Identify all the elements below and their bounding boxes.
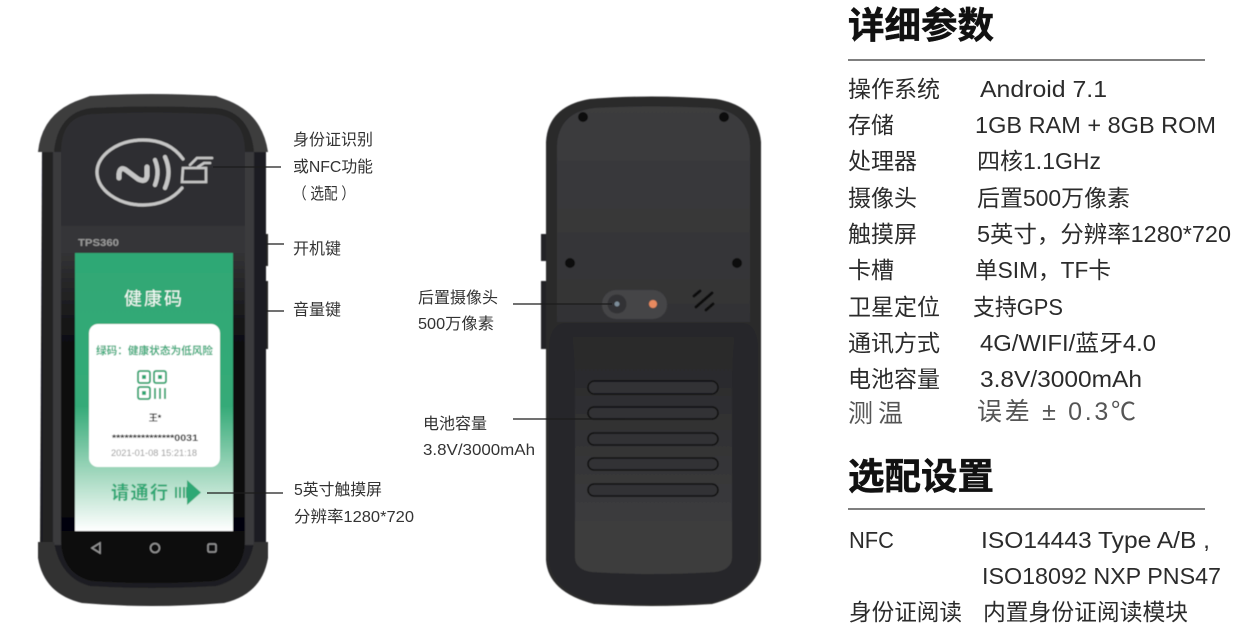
- nav buttons: [92, 543, 216, 553]
- options table: 身份证阅读: [849, 599, 962, 625]
- spec table: 操作系统: [848, 76, 940, 102]
- callout: touchscreen: 5英寸触摸屏: [294, 481, 382, 499]
- spec table: 处理器: [848, 148, 917, 174]
- card status: 绿码：健康状态为低风险: [96, 344, 214, 357]
- icon: QR code: [138, 371, 166, 399]
- spec table: 四核1.1GHz: [977, 148, 1101, 174]
- options table: NFC: [849, 527, 894, 553]
- top bumper: [38, 94, 268, 152]
- back body: [546, 96, 761, 606]
- spec table: 后置500万像素: [977, 185, 1130, 211]
- options table: [849, 527, 1221, 625]
- callout: NFC: 或NFC功能: [293, 158, 373, 176]
- callout: NFC: （ 选配 ）: [293, 185, 355, 203]
- callout: battery: 3.8V/3000mAh: [423, 442, 535, 459]
- screen title: 健康码: [124, 289, 182, 309]
- callout: touchscreen: 分辨率1280*720: [294, 508, 414, 526]
- callout: touchscreen: [294, 481, 414, 526]
- top panel: [61, 112, 245, 226]
- callout: power: 开机键: [293, 240, 341, 258]
- screen bezel: [61, 226, 245, 583]
- callout: camera: 后置摄像头: [418, 289, 498, 307]
- callout: battery: [423, 415, 535, 459]
- heading: details: 详细参数: [848, 5, 994, 46]
- spec table: [848, 76, 1231, 428]
- card timestamp: 2021-01-08 15:21:18: [111, 448, 197, 458]
- camera module: [602, 290, 667, 319]
- card id: ***************0031: [112, 433, 198, 443]
- model label: TPS360: [78, 237, 119, 249]
- spec table: 误差 ± 0.3℃: [977, 398, 1136, 426]
- bottom bumper: [38, 542, 268, 606]
- icon: arrow: [175, 480, 201, 505]
- spec table: 卡槽: [848, 257, 894, 283]
- spec table: Android 7.1: [980, 76, 1107, 102]
- icon: NFC logo: [97, 140, 212, 205]
- pass text: 请通行: [111, 483, 168, 503]
- spec table: 支持GPS: [973, 294, 1063, 320]
- card name: 王*: [149, 413, 162, 423]
- spec table: 测温: [848, 400, 903, 428]
- callout: battery: 电池容量: [423, 415, 487, 433]
- spec table: 单SIM，TF卡: [975, 257, 1111, 283]
- icon: speaker: [694, 291, 713, 310]
- spec table: 电池容量: [848, 366, 940, 392]
- spec table: 4G/WIFI/蓝牙4.0: [980, 330, 1156, 356]
- callout: NFC: 身份证识别: [293, 131, 373, 149]
- spec table: 5英寸，分辨率1280*720: [977, 221, 1231, 247]
- back plate: [557, 106, 750, 322]
- back device: [541, 96, 761, 606]
- spec table: 通讯方式: [848, 330, 940, 356]
- front device: [38, 94, 268, 606]
- spec table: 1GB RAM + 8GB ROM: [975, 112, 1216, 138]
- spec table: 3.8V/3000mAh: [980, 366, 1142, 392]
- heading: options: 选配设置: [848, 456, 994, 497]
- options table: ISO14443 Type A/B ,: [981, 527, 1210, 553]
- icon: screws: [565, 112, 742, 268]
- battery cover: [549, 323, 758, 604]
- screen: [75, 253, 233, 531]
- callout lines: [207, 167, 625, 493]
- callout: camera: 500万像素: [418, 315, 494, 333]
- spec table: 触摸屏: [848, 221, 917, 247]
- health card: [89, 324, 220, 467]
- options table: ISO18092 NXP PNS47: [982, 563, 1221, 589]
- options table: 内置身份证阅读模块: [983, 599, 1188, 625]
- device body: [40, 96, 266, 606]
- spec table: 卫星定位: [848, 294, 940, 320]
- callout: NFC: [293, 131, 373, 203]
- grip ribs: [588, 381, 718, 496]
- spec table: 存储: [848, 112, 894, 138]
- spec table: 摄像头: [848, 185, 917, 211]
- callout: volume: 音量键: [293, 301, 341, 319]
- callout: camera: [418, 289, 498, 333]
